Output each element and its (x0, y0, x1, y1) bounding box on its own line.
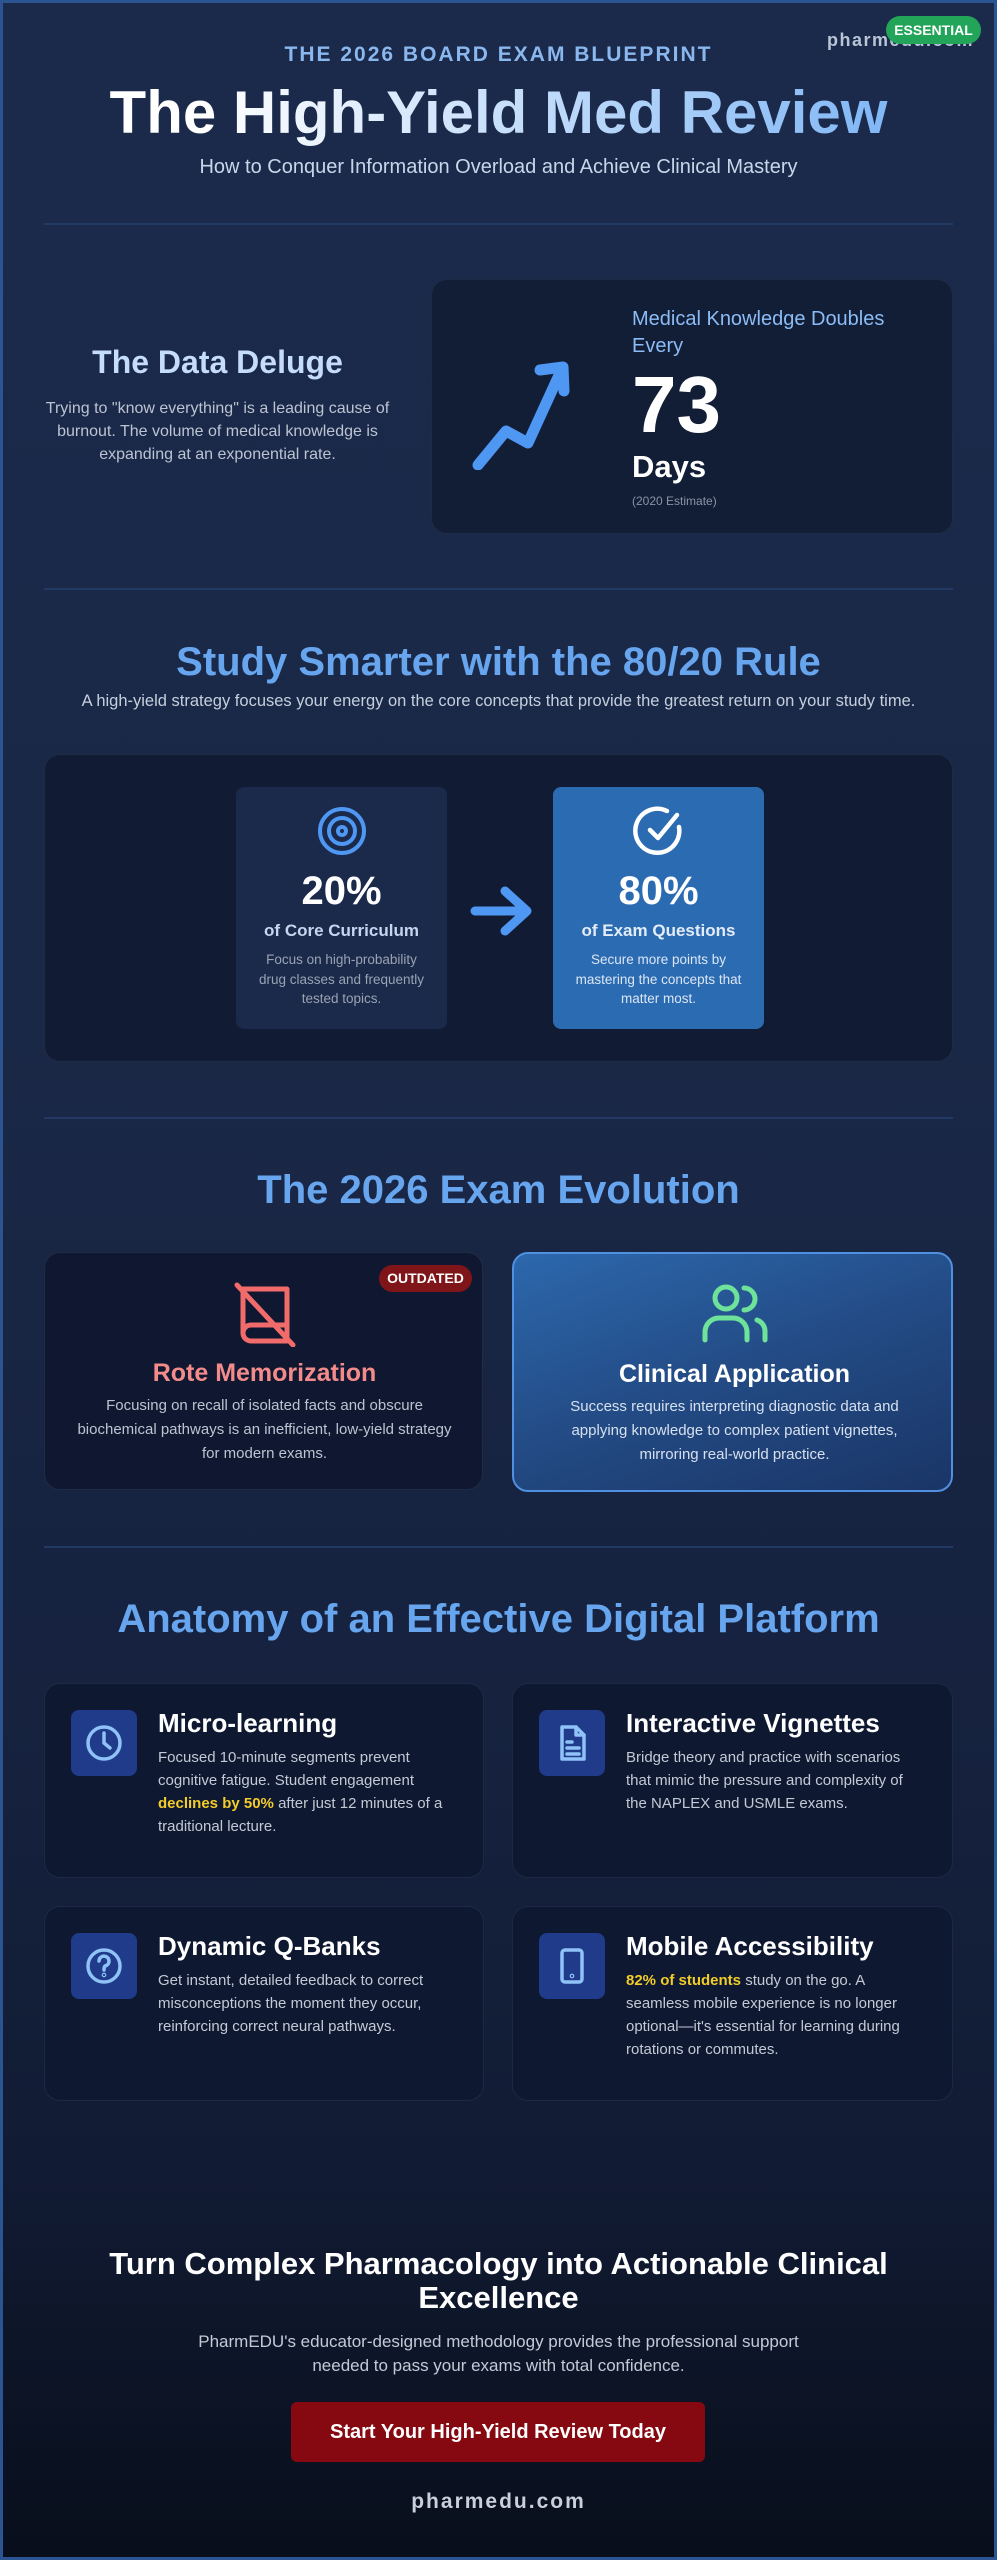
feature: interactive vignettes: Interactive Vignettes (626, 1708, 880, 1738)
icon: crossed book (234, 1282, 296, 1347)
text block: data deluge: The Data Deluge (92, 344, 343, 380)
header badge: pharmedu.com (827, 30, 974, 50)
badge (379, 1265, 472, 1292)
feature: micro-learning: Focused 10-minute segments prevent cognitive fatigue. Student engagement declines by 50% after just 12 minutes of a traditional lecture. (158, 1749, 442, 1835)
panel: stat card (431, 279, 953, 534)
feature: interactive vignettes: Bridge theory and practice with scenarios that mimic the pressure and complexity of the NAPLEX and USMLE exams. (626, 1749, 903, 1812)
panel: 80/20 (44, 754, 953, 1062)
box: 20%: Focus on high-probability drug classes and frequently tested topics. (259, 952, 424, 1006)
box: 80%: of Exam Questions (582, 921, 735, 940)
card: clinical application: Clinical Application (619, 1360, 850, 1388)
heading: 80/20: Study Smarter with the 80/20 Rule (176, 640, 821, 684)
box: 80%: Secure more points by mastering the concepts that matter most. (576, 952, 741, 1006)
feature: micro-learning (44, 1683, 484, 1878)
feature: mobile: 82% of students study on the go. A seamless mobile experience is no longer optional—it's essential for learning during rotations or commutes. (626, 1972, 900, 2058)
feature: q-banks: Dynamic Q-Banks (158, 1931, 381, 1961)
box: 20% (236, 787, 447, 1029)
button (291, 2402, 705, 2462)
footer CTA (109, 2246, 888, 2375)
card: rote memorization: Focusing on recall of isolated facts and obscure biochemical pathways is an inefficient, low-yield strategy for modern exams. (77, 1397, 452, 1462)
feature: mobile: Mobile Accessibility (626, 1931, 874, 1961)
feature: mobile (512, 1906, 953, 2101)
box: 80%: 80% (618, 869, 699, 913)
card: clinical application (512, 1252, 953, 1492)
text block: data deluge: Trying to "know everything" is a leading cause of burnout. The volume of medical knowledge is expanding at an exponential rate. (46, 400, 389, 463)
heading: anatomy: Anatomy of an Effective Digital Platform (117, 1597, 880, 1641)
heading: evolution: The 2026 Exam Evolution (257, 1168, 740, 1212)
box: 80% (553, 787, 764, 1029)
header badge (827, 16, 981, 50)
card: rote memorization (44, 1252, 483, 1490)
stat text: Medical Knowledge Doubles Every (632, 308, 884, 357)
title: The High-Yield Med Review (110, 79, 887, 146)
box: 20%: 20% (301, 869, 382, 913)
feature: interactive vignettes (512, 1683, 953, 1878)
badge: OUTDATED (387, 1270, 464, 1286)
header badge: ESSENTIAL (894, 22, 973, 38)
stat text: (2020 Estimate) (632, 494, 717, 508)
footer brand: pharmedu.com (411, 2490, 586, 2513)
text block: data deluge (46, 344, 390, 463)
feature: q-banks (44, 1906, 484, 2101)
arrow (470, 886, 532, 936)
stat text: Days (632, 449, 706, 484)
stat text (632, 308, 884, 508)
subheading: A high-yield strategy focuses your energy on the core concepts that provide the greatest return on your study time. (82, 692, 915, 710)
card: rote memorization: Rote Memorization (153, 1359, 376, 1387)
footer CTA: Turn Complex Pharmacology into Actionable Clinical Excellence (109, 2246, 888, 2315)
footer CTA: PharmEDU's educator-designed methodology provides the professional support needed to pass your exams with total confidence. (198, 2332, 799, 2375)
card: clinical application: Success requires interpreting diagnostic data and applying knowledge to complex patient vignettes, mirroring real-world practice. (570, 1398, 899, 1463)
kicker: THE 2026 BOARD EXAM BLUEPRINT (285, 43, 712, 66)
feature: q-banks: Get instant, detailed feedback to correct misconceptions the moment they occur, reinforcing correct neural pathways. (158, 1972, 423, 2035)
stat text: 73 (632, 360, 721, 449)
icon: users (702, 1284, 768, 1342)
feature: micro-learning: Micro-learning (158, 1708, 337, 1738)
subtitle: How to Conquer Information Overload and Achieve Clinical Mastery (199, 156, 798, 178)
button: Start Your High-Yield Review Today (330, 2421, 666, 2443)
box: 20%: of Core Curriculum (264, 921, 419, 940)
icon: trending arrow (472, 362, 570, 470)
